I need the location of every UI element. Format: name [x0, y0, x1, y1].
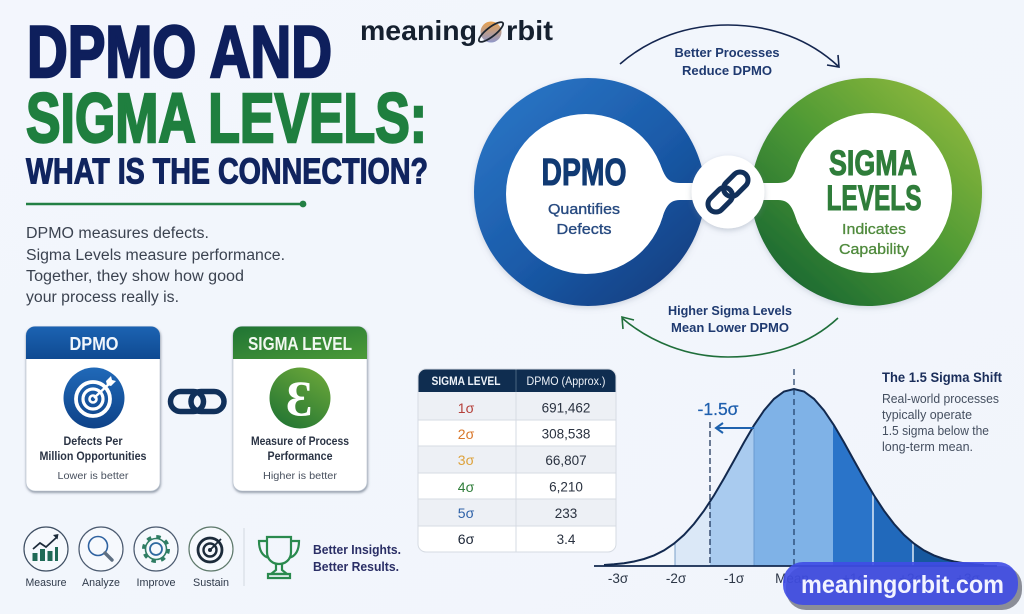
table rows: 6,210 — [549, 480, 583, 494]
table rows — [458, 400, 590, 547]
ring text: quantifies defects — [548, 201, 620, 238]
axis labels: -1σ — [724, 571, 745, 586]
callout body: Real-world processes — [882, 392, 999, 406]
table rows: 4σ — [458, 479, 475, 495]
icon: sigma — [270, 368, 330, 428]
step: Measure — [24, 527, 68, 589]
callout body: typically operate — [882, 408, 972, 422]
card description: Performance — [268, 451, 332, 463]
card description — [251, 436, 349, 482]
ring text: quantifies defects: Quantifies — [548, 201, 620, 218]
label: better processes: Better Processes — [674, 45, 780, 60]
axis labels: +3σ — [956, 571, 981, 586]
step: Measure: Measure — [26, 577, 66, 589]
arrow: higher sigma — [622, 317, 838, 357]
table rows: 308,538 — [542, 426, 590, 442]
axis labels — [608, 571, 981, 586]
table rows: 66,807 — [545, 453, 587, 468]
axis labels: +2σ — [899, 571, 924, 586]
intro paragraph: Together, they show how good — [26, 268, 244, 285]
callout body: long-term mean. — [882, 440, 973, 454]
mean marker — [793, 369, 795, 566]
table header: SIGMA LEVEL — [432, 374, 500, 388]
step: Improve — [134, 527, 178, 589]
axis labels: -3σ — [608, 571, 629, 586]
callout: better insights: Better Insights. — [313, 543, 401, 557]
title line: DPMO and: DPMO AND — [27, 12, 332, 93]
callout: the 1.5 sigma shift: The 1.5 Sigma Shift — [882, 370, 1002, 385]
axis labels: -2σ — [666, 571, 687, 586]
card header: Sigma Level: SIGMA LEVEL — [248, 334, 352, 354]
table rows: 691,462 — [542, 400, 590, 416]
label: higher sigma: Mean Lower DPMO — [671, 320, 789, 335]
title underline — [26, 201, 306, 207]
table rows: 2σ — [458, 426, 475, 442]
ring: DPMO — [474, 78, 712, 306]
axis labels: +1σ — [842, 571, 867, 586]
table rows: 3σ — [458, 452, 475, 468]
arrow: better processes — [620, 25, 839, 67]
card description: Million Opportunities — [40, 451, 146, 463]
table header — [432, 374, 606, 388]
arrow: shift — [716, 423, 754, 433]
axis labels: Mean — [775, 571, 809, 586]
step: Improve: Improve — [136, 577, 176, 589]
title — [26, 12, 428, 192]
ring text: DPMO: DPMO — [542, 152, 626, 194]
label: higher sigma — [668, 303, 792, 335]
callout body — [882, 392, 999, 454]
title line: what is the connection: WHAT IS THE CONNECTION? — [26, 150, 428, 192]
step: Sustain: Sustain — [193, 577, 229, 589]
card description: Lower is better — [58, 470, 129, 482]
panel: Sigma Level card — [233, 326, 367, 491]
callout body: 1.5 sigma below the — [882, 424, 989, 438]
card description — [40, 436, 146, 482]
card description: Defects Per — [64, 436, 123, 448]
badge: meaningorbit.com — [783, 562, 1018, 605]
card description: Measure of Process — [251, 436, 349, 448]
icon: trophy — [259, 537, 299, 578]
step: Analyze: Analyze — [82, 577, 120, 589]
label: higher sigma: Higher Sigma Levels — [668, 303, 792, 318]
icon: chain between cards — [170, 392, 224, 412]
shift marker — [709, 422, 711, 566]
table rows: 5σ — [458, 505, 475, 521]
bell curve regions — [674, 390, 970, 566]
chart: bell curve — [594, 369, 997, 586]
icon: central link — [692, 156, 764, 228]
title line: Sigma Levels: SIGMA LEVELS: — [26, 79, 427, 157]
ring text: indicates capability: Indicates — [842, 222, 906, 238]
card header: Sigma Level — [233, 326, 367, 359]
logo: meaningorbit — [360, 15, 553, 46]
callout: better insights — [313, 543, 401, 574]
label: better processes — [674, 45, 780, 78]
diagram: DPMO and Sigma linked rings — [474, 25, 982, 357]
label: minus 1.5 sigma: -1.5σ — [698, 399, 739, 419]
card description: Higher is better — [263, 470, 338, 482]
intro paragraph: DPMO measures defects. — [26, 225, 209, 242]
card header: DPMO — [26, 326, 160, 359]
badge: meaningorbit.com: meaningorbit.com — [801, 571, 1004, 599]
ring text: Sigma Levels: LEVELS — [826, 179, 922, 218]
process steps row — [24, 527, 233, 589]
table rows: 3.4 — [557, 532, 576, 547]
step: Sustain — [189, 527, 233, 589]
ring text: indicates capability — [839, 222, 910, 258]
ring: Sigma Levels — [744, 78, 982, 306]
logo: meaningorbit: rbit — [506, 15, 553, 46]
ring text: Sigma Levels: SIGMA — [829, 144, 917, 183]
icon: sigma: Ɛ — [286, 370, 312, 426]
table: sigma level vs DPMO — [418, 369, 616, 552]
ring text: indicates capability: Capability — [839, 242, 910, 258]
card header: DPMO: DPMO — [70, 334, 118, 354]
ring text: Sigma Levels — [826, 144, 922, 218]
callout: better insights: Better Results. — [313, 560, 399, 574]
table header: DPMO (Approx.) — [526, 374, 606, 388]
intro paragraph — [26, 225, 285, 306]
panel: DPMO card — [26, 326, 160, 491]
label: better processes: Reduce DPMO — [682, 63, 772, 78]
curve outline — [604, 389, 984, 565]
table rows: 6σ — [458, 531, 475, 547]
table rows: 1σ — [458, 400, 475, 416]
intro paragraph: Sigma Levels measure performance. — [26, 247, 285, 264]
ring text: quantifies defects: Defects — [556, 221, 612, 238]
callout: the 1.5 sigma shift — [882, 370, 1002, 454]
icon: target — [64, 368, 124, 428]
step: Analyze — [79, 527, 123, 589]
table rows: 233 — [555, 506, 577, 521]
intro paragraph: your process really is. — [26, 289, 179, 306]
icon: planet — [476, 19, 506, 45]
logo: meaningorbit: meaning — [360, 15, 477, 46]
